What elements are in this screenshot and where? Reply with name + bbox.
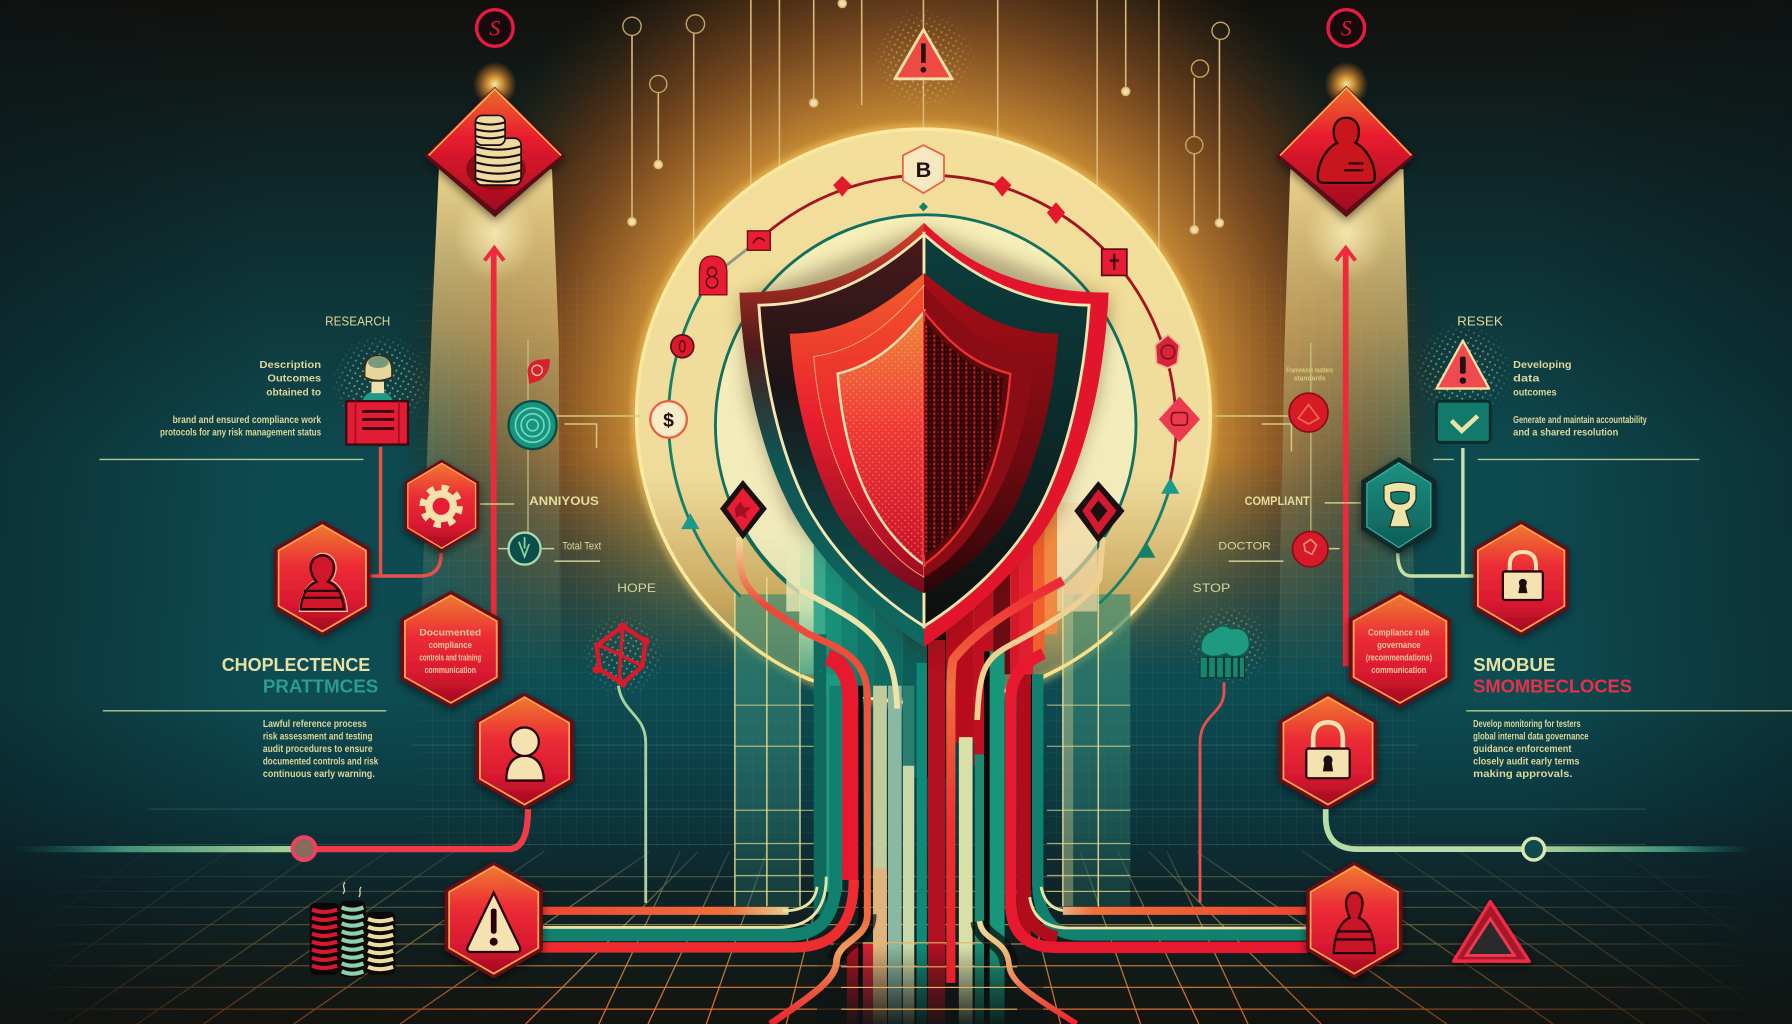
hexagon caption: communication <box>1371 665 1427 675</box>
hope label: HOPE <box>617 581 656 595</box>
left text hexagon <box>401 592 500 706</box>
left heading <box>222 654 378 697</box>
left tower arrow <box>485 248 504 621</box>
red seal upper <box>1289 393 1328 432</box>
ring icon: left lower diamond <box>720 480 767 539</box>
ring icon: top badge <box>903 145 944 193</box>
right paragraph <box>1473 719 1589 780</box>
research label: RESEARCH <box>325 314 390 329</box>
risk label: RESEK <box>1457 314 1503 329</box>
risk text block: outcomes <box>1513 387 1557 398</box>
left heading: CHOPLECTENCE <box>222 654 370 675</box>
right timeline <box>1326 809 1754 860</box>
left paragraph: risk assessment and testing <box>263 731 373 742</box>
risk text block: and a shared resolution <box>1513 427 1618 438</box>
compliant label: COMPLIANT <box>1245 494 1310 508</box>
top right dollar badge: S <box>1341 16 1352 40</box>
right heading <box>1473 654 1632 697</box>
shield outer right <box>924 223 1109 647</box>
research text block: Description <box>259 360 321 371</box>
user hexagon <box>275 522 369 635</box>
shield shadow <box>739 229 1111 656</box>
right divider upper <box>1433 458 1699 460</box>
warning triangle bottom right <box>1454 902 1529 961</box>
left diamond top flare <box>473 62 517 107</box>
hexagon caption: (recommendations) <box>1366 653 1432 663</box>
research text block: Outcomes <box>267 374 321 385</box>
top left dollar badge <box>477 10 513 46</box>
risk text block: data <box>1513 374 1540 385</box>
left lower panel <box>735 577 814 906</box>
research text block <box>160 360 322 438</box>
hexagon caption: controls and training <box>419 653 481 663</box>
doctor label: DOCTOR <box>1218 541 1271 553</box>
right circuit connectors <box>1215 416 1361 549</box>
green spiral badge <box>509 401 557 449</box>
ring icon: square left <box>747 231 770 250</box>
shield mid layer right <box>924 286 1034 577</box>
researcher icon <box>330 333 431 445</box>
small upper label: Framework matters <box>1286 366 1333 375</box>
right paragraph: global internal data governance <box>1473 731 1589 742</box>
risk text block <box>1513 360 1647 438</box>
right text hexagon <box>1350 592 1450 706</box>
user icon <box>299 553 347 611</box>
ribbon stripes lower <box>814 634 1043 1024</box>
red seal lower <box>1293 531 1328 567</box>
ring markers <box>681 176 1179 558</box>
ring icon: tombstone <box>699 256 727 295</box>
right light beam <box>1278 169 1417 697</box>
green stack <box>339 901 366 977</box>
left heading: PRATTMCES <box>263 676 378 697</box>
ring icon: red badge right <box>1155 335 1179 368</box>
right diamond top flare <box>1325 62 1368 107</box>
coin stacks <box>310 882 395 977</box>
shield red layer right <box>924 273 1058 593</box>
stop connector <box>1200 682 1224 903</box>
lock icon <box>1306 722 1350 778</box>
right tower arrow <box>1336 248 1355 666</box>
hanging connector lines <box>623 0 1229 274</box>
ring icon: square right <box>1102 249 1127 275</box>
left bus lines <box>541 537 897 1024</box>
red stack <box>310 903 339 975</box>
network icon <box>579 611 666 698</box>
risk text block: Generate and maintain accountability <box>1513 415 1647 426</box>
shield core right <box>924 312 1010 565</box>
left paragraph: Lawful reference process <box>263 719 367 730</box>
shield dark layer left <box>759 234 924 626</box>
right heading divider <box>1466 710 1792 712</box>
right tree line <box>1310 343 1312 560</box>
person hexagon bottom right <box>1307 863 1401 977</box>
shield mid layer left <box>814 286 924 577</box>
doctor label <box>1218 541 1283 561</box>
team label <box>554 541 601 561</box>
teal hexagon <box>1362 458 1435 552</box>
risk text block: Developing <box>1513 360 1572 371</box>
ring icon: dollar coin: $ <box>663 409 674 431</box>
ribbon stripes upper <box>786 503 1097 777</box>
lock hexagon <box>1475 522 1568 635</box>
right heading: SMOMBECLOCES <box>1473 676 1632 697</box>
team label: Total Text <box>562 541 601 553</box>
stop label: STOP <box>1193 581 1230 595</box>
ring icon: small circle <box>671 335 694 358</box>
research text block: protocols for any risk management status <box>160 427 321 438</box>
cream stack <box>366 912 395 975</box>
top left dollar badge: S <box>489 16 500 40</box>
hope connector <box>618 686 646 903</box>
ring icon: top badge: B <box>916 157 931 182</box>
hexagon caption <box>419 627 481 675</box>
shield <box>739 223 1111 656</box>
green check ring <box>498 533 554 565</box>
left coin diamond <box>424 87 565 217</box>
perspective floor grid <box>0 851 1792 1024</box>
hexagon caption: Compliance rule <box>1368 627 1430 637</box>
hexagon caption: governance <box>1377 640 1421 650</box>
inner ring lower arcs <box>741 525 1111 593</box>
left paragraph <box>263 719 379 780</box>
shield outer left <box>739 223 924 647</box>
hexagon caption <box>1366 627 1432 675</box>
top warning triangle icon <box>875 10 973 106</box>
research text block: obtained to <box>266 387 321 398</box>
large glowing circle <box>635 128 1211 704</box>
left circuit connectors <box>480 416 640 504</box>
shield dark layer right <box>924 234 1089 626</box>
right paragraph: closely audit early terms <box>1473 757 1579 768</box>
keyhole trophy icon <box>1384 482 1416 527</box>
hexagon caption: communication <box>425 665 476 675</box>
circle lower arcs <box>735 632 1112 680</box>
lock hexagon lower <box>1280 694 1376 808</box>
left divider upper <box>99 458 363 460</box>
right heading: SMOBUE <box>1473 654 1555 675</box>
inner green ring <box>715 215 1136 635</box>
top right dollar badge <box>1328 10 1365 46</box>
ring icon: diamond right <box>1159 397 1200 442</box>
right person diamond <box>1276 86 1415 217</box>
research connector <box>369 447 441 576</box>
risk warning and check icons <box>1413 321 1513 442</box>
right column connector <box>1398 448 1474 576</box>
left paragraph: documented controls and risk <box>263 757 379 768</box>
small upper label: standards <box>1294 374 1326 383</box>
small upper label <box>1286 366 1333 383</box>
background grid <box>149 274 1646 846</box>
gear hexagon <box>405 461 478 551</box>
left timeline <box>11 809 528 860</box>
person glyph <box>1318 118 1375 183</box>
right paragraph: guidance enforcement <box>1473 744 1572 755</box>
warning icon <box>467 893 520 952</box>
red leaf icon <box>528 359 550 384</box>
ring icon: dollar coin <box>650 401 687 438</box>
left tree line <box>527 339 529 549</box>
research text block: brand and ensured compliance work <box>173 415 322 426</box>
left paragraph: continuous early warning. <box>263 769 375 780</box>
right bus lines <box>951 537 1307 1024</box>
orbit ring arcs <box>669 175 1176 603</box>
left paragraph: audit procedures to ensure <box>263 744 373 755</box>
person icon <box>1334 893 1375 953</box>
shield core left <box>838 312 924 565</box>
hexagon caption: Documented <box>419 627 481 637</box>
green plant icon <box>1185 602 1272 689</box>
person hexagon <box>477 694 573 808</box>
ring icon: right lower diamond <box>1074 481 1125 543</box>
coin stacks <box>466 115 526 190</box>
right paragraph: making approvals. <box>1473 769 1573 780</box>
hexagon caption: compliance <box>429 640 472 650</box>
shield red layer left <box>790 273 924 593</box>
right lower panel <box>1047 571 1130 906</box>
person icon <box>506 727 544 781</box>
lock icon <box>1503 552 1543 600</box>
left heading divider <box>103 710 386 712</box>
warning hexagon <box>446 863 542 977</box>
right paragraph: Develop monitoring for testers <box>1473 719 1581 730</box>
annual label: ANNIYOUS <box>529 494 599 508</box>
gear icon <box>423 489 459 524</box>
left light beam <box>418 169 560 697</box>
